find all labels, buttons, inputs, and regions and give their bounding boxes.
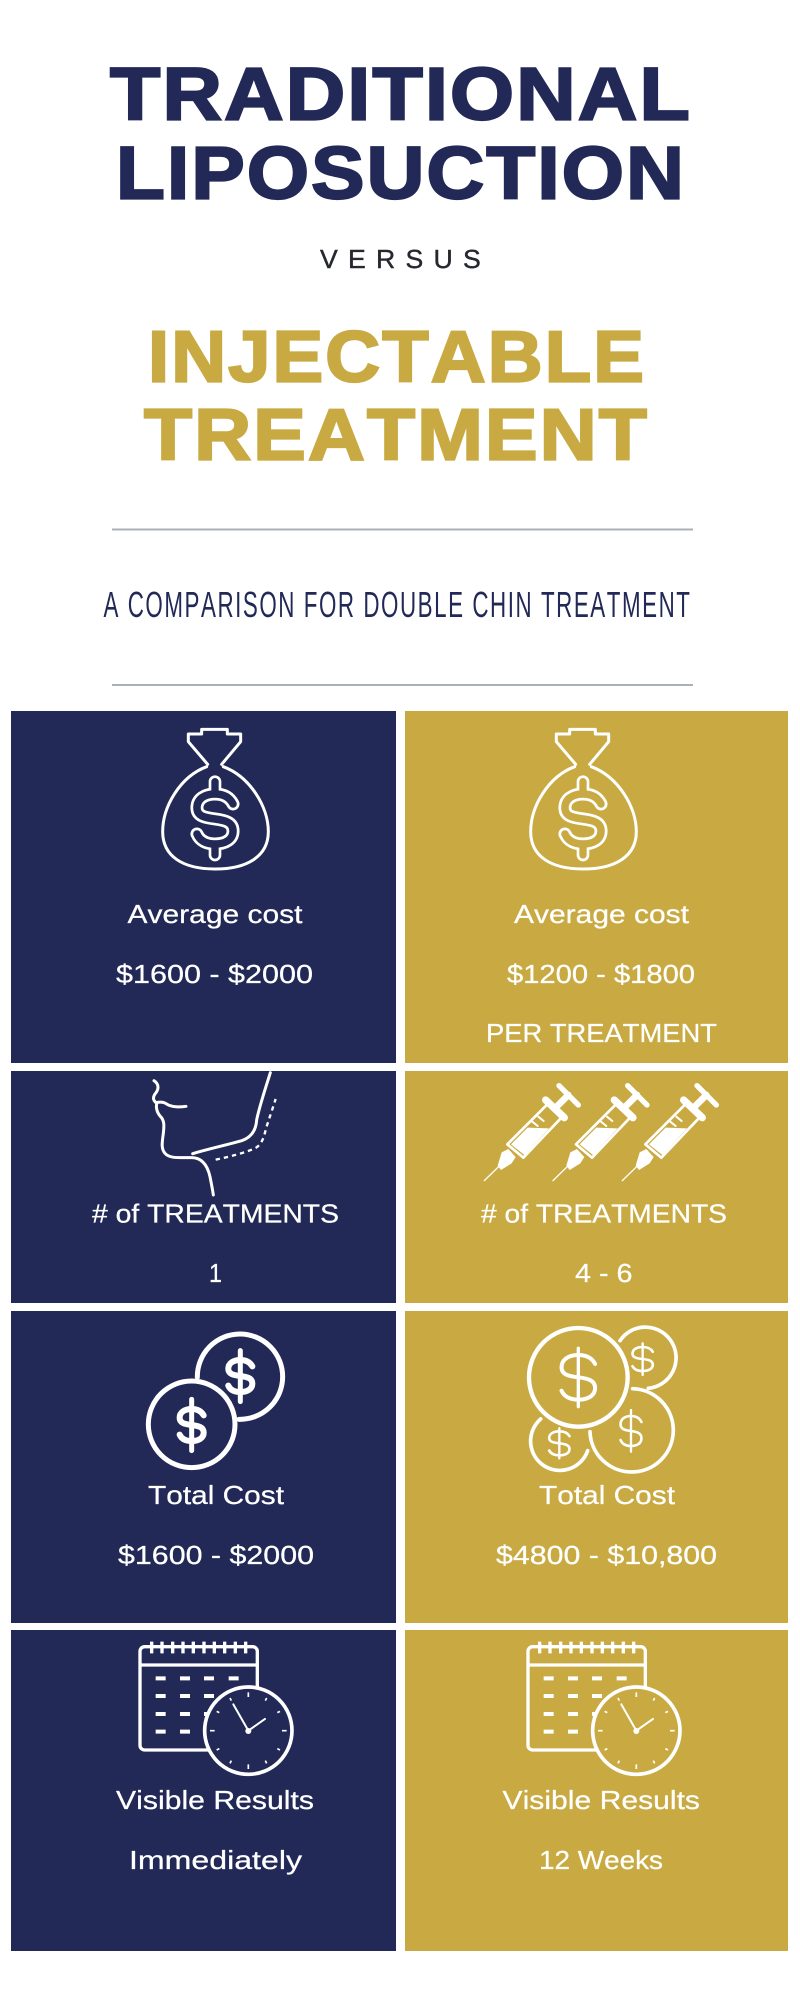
title: traditional liposuction xyxy=(110,52,692,214)
title: injectable treatment xyxy=(144,318,649,476)
label: average cost: Average cost xyxy=(128,899,303,929)
label: average cost: Average cost xyxy=(514,899,690,929)
label: total cost: Total Cost xyxy=(539,1480,676,1510)
icon: face profile with chin xyxy=(153,1073,276,1195)
value: one: 1 xyxy=(209,1258,222,1288)
icon: three syringes xyxy=(484,1086,716,1181)
value: cost range: $1600 - $2000 xyxy=(116,959,313,989)
note: per treatment: PER TREATMENT xyxy=(486,1018,717,1048)
value: twelve weeks: 12 Weeks xyxy=(539,1845,663,1875)
value: total range: $1600 - $2000 xyxy=(118,1540,314,1570)
label: visible results: Visible Results xyxy=(116,1785,314,1815)
value: total range: $4800 - $10,800 xyxy=(496,1540,717,1570)
title: traditional liposuction: LIPOSUCTION xyxy=(116,132,686,214)
panel: liposuction number of treatments xyxy=(11,1071,396,1303)
label: total cost: Total Cost xyxy=(148,1480,285,1510)
label: visible results: Visible Results xyxy=(502,1785,700,1815)
title: injectable treatment: INJECTABLE xyxy=(148,318,646,398)
title: injectable treatment: TREATMENT xyxy=(144,396,649,476)
panel: injectable average cost xyxy=(405,711,788,1063)
label: number of treatments: # of TREATMENTS xyxy=(481,1198,727,1228)
panel: injectable visible results xyxy=(405,1630,788,1951)
panel: liposuction visible results xyxy=(11,1630,396,1951)
heading: versus: VERSUS xyxy=(320,244,491,274)
panel: injectable number of treatments xyxy=(405,1071,788,1303)
value: four to six: 4 - 6 xyxy=(575,1258,632,1288)
title: traditional liposuction: TRADITIONAL xyxy=(110,52,692,136)
value: cost range: $1200 - $1800 xyxy=(507,959,695,989)
syringe two xyxy=(553,1086,647,1181)
panel: liposuction total cost xyxy=(11,1311,396,1623)
panel: injectable total cost xyxy=(405,1311,788,1623)
icon: money bag xyxy=(531,729,636,869)
value: immediately: Immediately xyxy=(129,1845,302,1875)
panel: liposuction average cost xyxy=(11,711,396,1063)
label: number of treatments: # of TREATMENTS xyxy=(92,1198,339,1228)
icon: calendar and clock xyxy=(528,1642,680,1774)
icon: money bag xyxy=(163,729,268,869)
icon: four coins xyxy=(529,1327,676,1472)
syringe three xyxy=(622,1086,716,1181)
icon: two coins xyxy=(148,1334,283,1468)
syringe one xyxy=(484,1086,578,1181)
icon: calendar and clock xyxy=(140,1642,292,1774)
